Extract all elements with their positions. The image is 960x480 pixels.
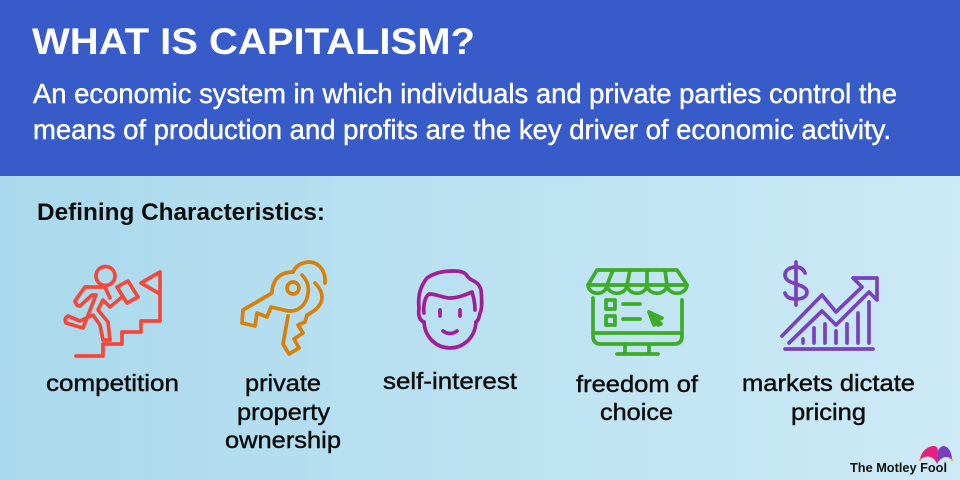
header band [0, 0, 960, 176]
logo: The Motley Fool: The Motley Fool [850, 460, 947, 475]
item: freedom of choice [576, 270, 699, 425]
definition text: An economic system in which individuals and private parties control the [33, 78, 897, 109]
item: self-interest [383, 271, 518, 394]
label: markets dictate [742, 370, 915, 396]
label [576, 371, 699, 425]
title: WHAT IS CAPITALISM? [32, 21, 475, 62]
icon: online storefront [588, 270, 687, 354]
item: private property ownership [225, 262, 341, 453]
label [225, 370, 341, 453]
icon: runner climbing stairs to flag [65, 266, 160, 356]
label: pricing [791, 399, 866, 425]
section heading: Defining Characteristics: [37, 199, 325, 226]
label: freedom of [576, 371, 699, 397]
item: competition [46, 266, 179, 396]
label [742, 370, 915, 425]
label: competition [46, 370, 179, 396]
icon: jester hat [919, 446, 953, 464]
label: property [237, 399, 330, 425]
label: ownership [225, 427, 341, 453]
label: choice [600, 399, 673, 425]
icon: dollar sign and rising chart [782, 262, 877, 349]
icon: face [419, 271, 482, 348]
label: private [245, 370, 321, 396]
item: markets dictate pricing [742, 262, 915, 425]
background panel [0, 176, 960, 480]
definition text: means of production and profits are the key driver of economic activity. [33, 114, 891, 145]
definition text [33, 78, 897, 145]
icon: keys [242, 262, 325, 354]
label: self-interest [383, 368, 518, 394]
logo: The Motley Fool [850, 446, 953, 475]
